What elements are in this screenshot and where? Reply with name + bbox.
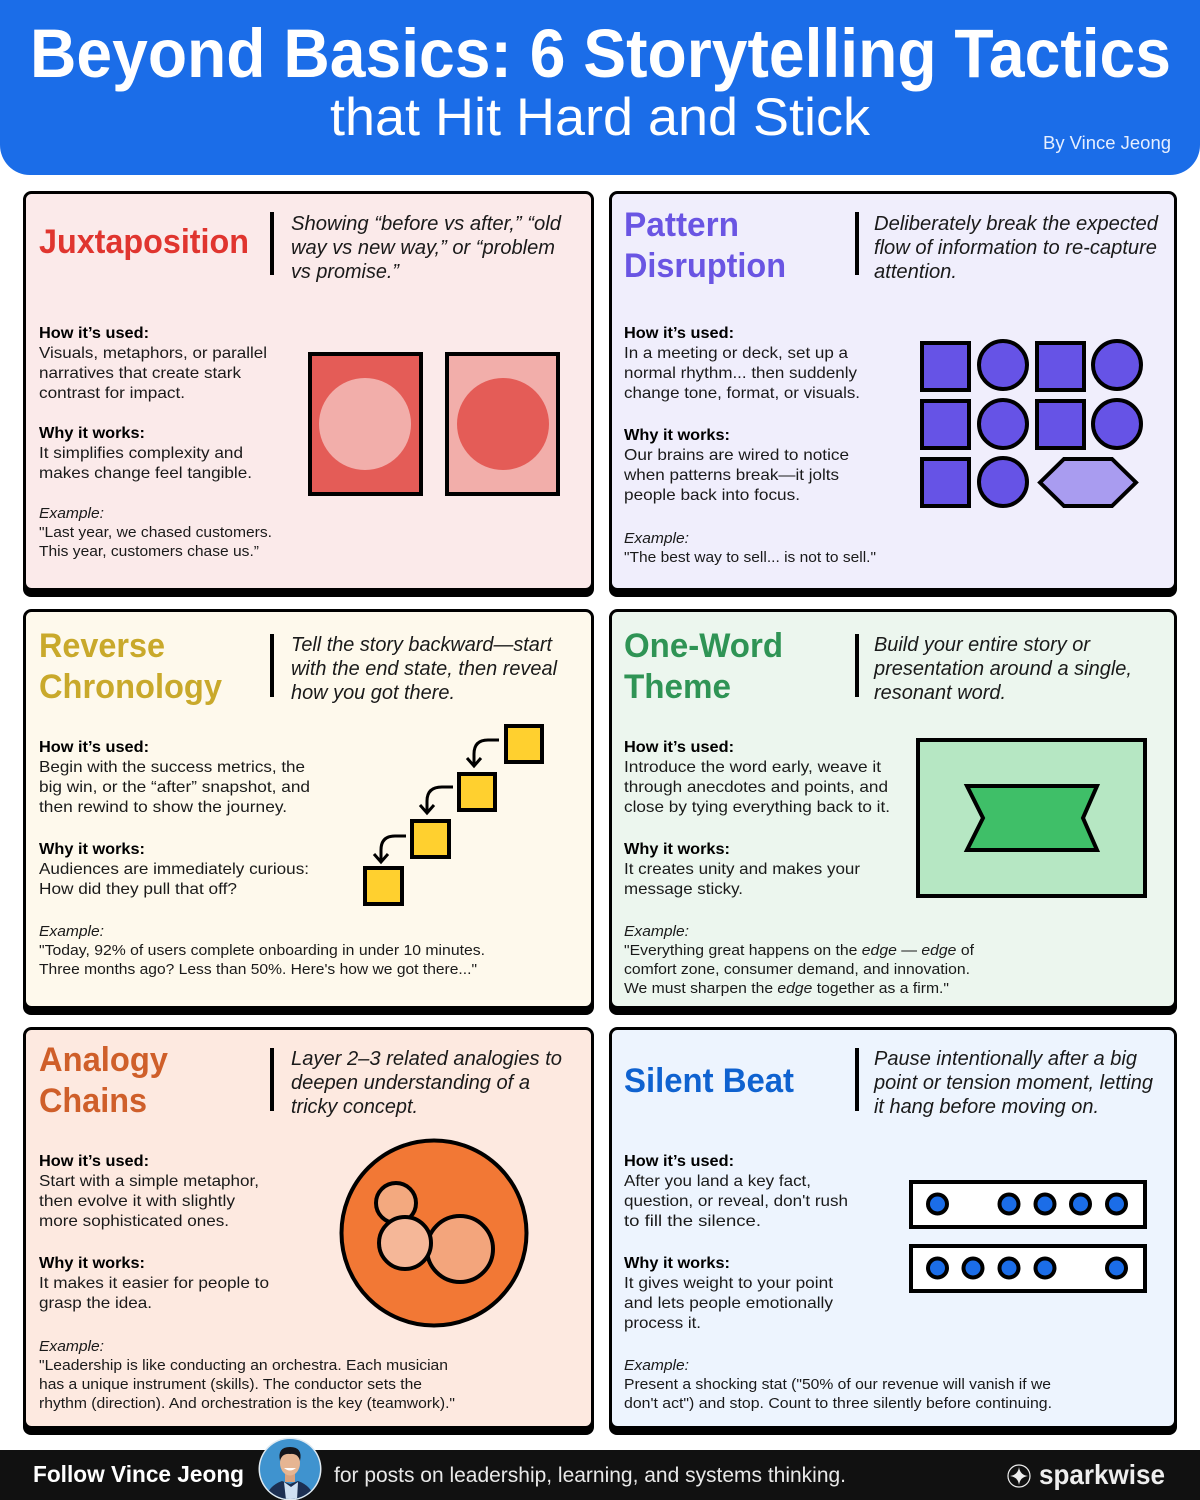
example: don't act") and stop. Count to three silently before continuing. [624, 1396, 1052, 1412]
example: comfort zone, consumer demand, and innovation. [624, 962, 970, 978]
how it's used: close by tying everything back to it. [624, 799, 890, 816]
example [39, 923, 485, 978]
why it works: It simplifies complexity and [39, 445, 243, 462]
panel: Silent Beat [609, 1028, 1177, 1435]
why it works: message sticky. [624, 881, 743, 898]
description [874, 213, 1159, 283]
heading: One-Word [624, 627, 783, 665]
example: Example: [39, 923, 104, 940]
how it's used: How it’s used: [39, 739, 149, 756]
how it's used: normal rhythm... then suddenly [624, 365, 857, 382]
example: Example: [624, 923, 689, 940]
description: attention. [874, 261, 957, 283]
why it works [623, 427, 849, 504]
why it works [39, 841, 309, 898]
example [624, 530, 876, 566]
example: This year, customers chase us.” [39, 544, 259, 560]
example: Example: [39, 1338, 104, 1355]
panel: Juxtaposition [23, 192, 594, 597]
how it's used: change tone, format, or visuals. [624, 385, 860, 402]
example: "Leadership is like conducting an orchestra. Each musician [39, 1358, 448, 1374]
why it works: It creates unity and makes your [624, 861, 861, 878]
why it works: It makes it easier for people to [39, 1275, 269, 1292]
description: it hang before moving on. [874, 1096, 1099, 1118]
example [39, 505, 272, 560]
description: way vs new way,” or “problem [291, 237, 555, 259]
why it works: process it. [624, 1315, 701, 1332]
example: Example: [624, 530, 689, 547]
description: vs promise.” [291, 261, 400, 283]
how it's used: How it’s used: [624, 325, 734, 342]
icon: nested circles [342, 1140, 526, 1326]
follow tagline: for posts on leadership, learning, and systems thinking. [334, 1464, 846, 1487]
sparkwise logo: sparkwise [1039, 1459, 1165, 1490]
example: "Today, 92% of users complete onboarding in under 10 minutes. [39, 943, 485, 959]
panel: Analogy Chains [23, 1028, 594, 1435]
why it works: Why it works: [624, 1255, 730, 1272]
heading [39, 1041, 168, 1120]
why it works: grasp the idea. [39, 1295, 152, 1312]
why it works [39, 425, 252, 482]
follow label: Follow Vince Jeong [33, 1461, 244, 1487]
why it works: Why it works: [624, 427, 730, 444]
why it works: and lets people emotionally [624, 1295, 833, 1312]
how it's used [39, 325, 267, 402]
description: Pause intentionally after a big [874, 1048, 1137, 1070]
why it works: How did they pull that off? [39, 881, 237, 898]
heading [624, 627, 783, 706]
how it's used: big win, or the “after” snapshot, and [39, 779, 310, 796]
heading [39, 627, 222, 706]
why it works: It gives weight to your point [624, 1275, 834, 1292]
description: how you got there. [291, 682, 455, 704]
how it's used: then evolve it with slightly [39, 1193, 235, 1210]
description: deepen understanding of a [291, 1072, 530, 1094]
description [291, 634, 558, 704]
heading: Silent Beat [624, 1062, 794, 1100]
how it's used: Start with a simple metaphor, [39, 1173, 259, 1190]
description [873, 634, 1132, 704]
example: "The best way to sell... is not to sell." [624, 550, 876, 566]
description: Showing “before vs after,” “old [291, 213, 562, 235]
how it's used [624, 739, 890, 816]
description: Layer 2–3 related analogies to [291, 1048, 562, 1070]
description: Deliberately break the expected [874, 213, 1159, 235]
how it's used: through anecdotes and points, and [624, 779, 888, 796]
how it's used: then rewind to show the journey. [39, 799, 287, 816]
description: tricky concept. [291, 1096, 418, 1118]
description: presentation around a single, [873, 658, 1132, 680]
description: point or tension moment, letting [873, 1072, 1153, 1094]
icon: sparkwise star [1008, 1465, 1030, 1487]
how it's used [39, 739, 310, 816]
why it works [624, 1255, 834, 1332]
example: Example: [624, 1357, 689, 1374]
example [624, 923, 975, 997]
description: Build your entire story or [874, 634, 1091, 656]
avatar portrait [258, 1437, 322, 1500]
why it works: Why it works: [39, 841, 145, 858]
how it's used: How it’s used: [624, 739, 734, 756]
how it's used: How it’s used: [39, 325, 149, 342]
how it's used [39, 1153, 259, 1230]
why it works: people back into focus. [624, 487, 800, 504]
example [624, 1357, 1052, 1412]
byline: By Vince Jeong [1043, 133, 1171, 153]
example [39, 1338, 455, 1412]
why it works: makes change feel tangible. [39, 465, 252, 482]
why it works: Audiences are immediately curious: [39, 861, 309, 878]
how it's used: narratives that create stark [39, 365, 242, 382]
how it's used: question, or reveal, don't rush [624, 1193, 848, 1210]
description: resonant word. [874, 682, 1006, 704]
example: "Last year, we chased customers. [39, 525, 272, 541]
icon: contrasting cards [310, 354, 558, 494]
how it's used: more sophisticated ones. [39, 1213, 229, 1230]
icon: descending steps with arrows [365, 726, 542, 904]
description [873, 1048, 1153, 1118]
description: flow of information to re-capture [874, 237, 1157, 259]
how it's used: Introduce the word early, weave it [624, 759, 882, 776]
heading [624, 206, 786, 285]
how it's used: After you land a key fact, [624, 1173, 811, 1190]
why it works [39, 1255, 269, 1312]
example: Present a shocking stat ("50% of our revenue will vanish if we [624, 1377, 1051, 1393]
heading: Reverse [39, 627, 165, 665]
why it works: when patterns break—it jolts [623, 467, 839, 484]
how it's used: How it’s used: [624, 1153, 734, 1170]
example: has a unique instrument (skills). The conductor sets the [39, 1377, 422, 1393]
how it's used: In a meeting or deck, set up a [624, 345, 848, 362]
how it's used: to fill the silence. [624, 1213, 761, 1230]
example: "Everything great happens on the edge — edge of [624, 943, 975, 959]
how it's used [624, 1153, 848, 1230]
heading: Theme [624, 668, 731, 706]
heading: Disruption [624, 247, 786, 285]
why it works: Why it works: [624, 841, 730, 858]
panel: Reverse Chronology [23, 610, 594, 1015]
how it's used [624, 325, 860, 402]
example: Example: [39, 505, 104, 522]
description: with the end state, then reveal [291, 658, 558, 680]
why it works: Why it works: [39, 1255, 145, 1272]
how it's used: Begin with the success metrics, the [39, 759, 305, 776]
icon: shape pattern with break [922, 341, 1141, 506]
why it works [624, 841, 861, 898]
example: rhythm (direction). And orchestration is the key (teamwork)." [39, 1396, 455, 1412]
icon: rows of beats with a gap [911, 1182, 1145, 1291]
panel: Pattern Disruption [609, 192, 1177, 597]
how it's used: Visuals, metaphors, or parallel [39, 345, 267, 362]
heading: Chains [39, 1082, 147, 1120]
footer bar [0, 1437, 1200, 1500]
subtitle: that Hit Hard and Stick [330, 88, 871, 147]
why it works: Our brains are wired to notice [624, 447, 849, 464]
icon: banner in frame [918, 740, 1145, 896]
description [291, 213, 562, 283]
header banner [0, 0, 1200, 175]
description: Tell the story backward—start [291, 634, 553, 656]
why it works: Why it works: [39, 425, 145, 442]
how it's used: How it’s used: [39, 1153, 149, 1170]
heading: Pattern [624, 206, 739, 244]
example: We must sharpen the edge together as a firm." [624, 981, 949, 997]
heading: Analogy [39, 1041, 168, 1079]
description [291, 1048, 562, 1118]
how it's used: contrast for impact. [39, 385, 185, 402]
heading: Juxtaposition [39, 223, 249, 261]
heading: Chronology [39, 668, 222, 706]
panel: One-Word Theme [609, 610, 1177, 1015]
example: Three months ago? Less than 50%. Here's how we got there..." [39, 962, 477, 978]
